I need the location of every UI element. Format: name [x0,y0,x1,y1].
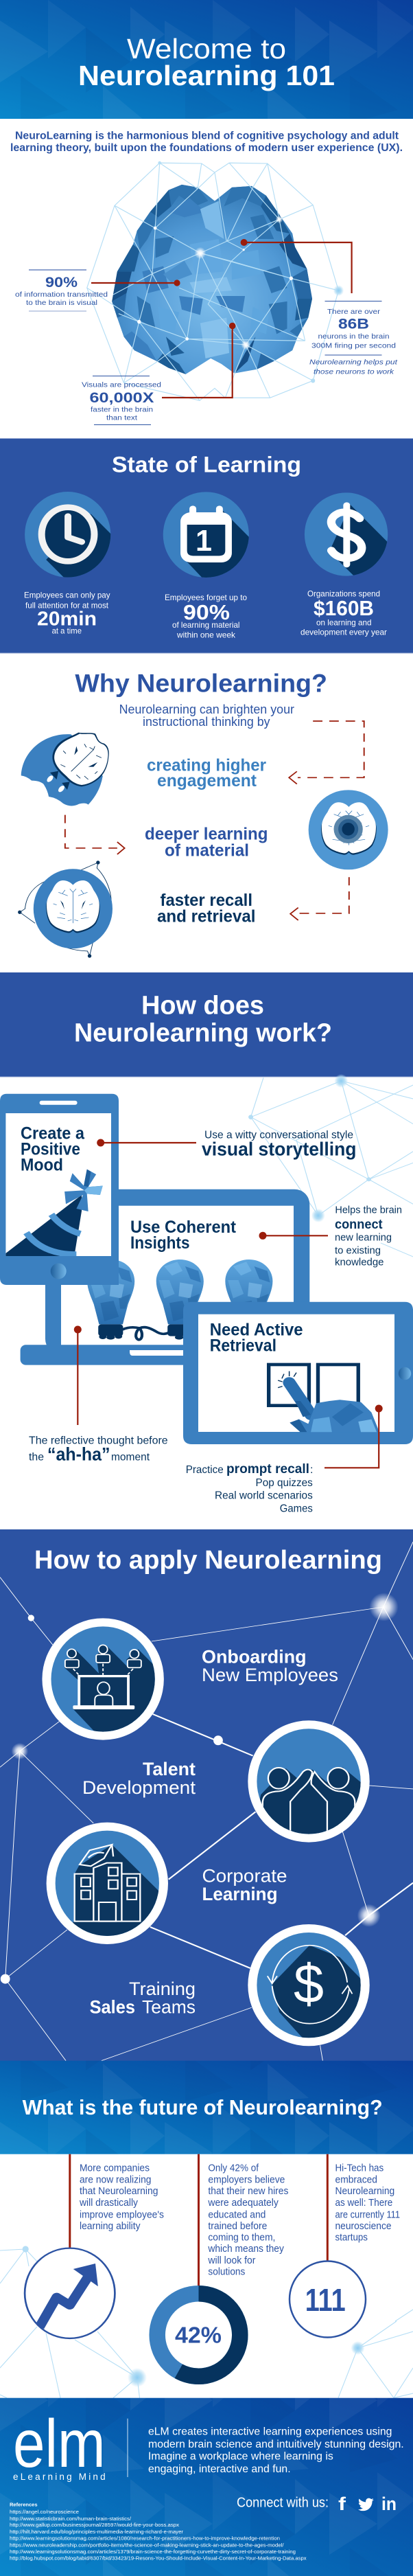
icon: onboarding [42,1618,172,1740]
callout: 90 percent: to the brain is visual [26,299,97,307]
text: only 42 percent: educated and [208,2209,266,2220]
text: only 42 percent: Only 42% of [208,2163,259,2174]
callout: ah-ha moment: “ah-ha” [47,1444,110,1465]
icon: talent high five [248,1720,370,1843]
text: about eLM [148,2426,404,2475]
text: talent development [82,1759,196,1798]
callout: visual storytelling: visual storytelling [202,1138,357,1159]
callout: 86B neurons: 300M firing per second [311,342,396,350]
callout: connect: knowledge [335,1257,384,1268]
title: Neurolearning 101 [78,60,335,91]
callout: 90 percent [15,269,180,312]
text: 90 percent forget: 90% [183,600,230,624]
heading: why neurolearning: Why Neurolearning? [75,670,327,698]
badge: 111 startups: 111 [305,2282,346,2318]
text: training sales teams [90,1979,196,2018]
text: creating higher engagement [147,756,266,790]
text: only 42 percent: trained before [208,2221,267,2232]
text: talent development: Development [82,1777,196,1798]
text: hi-tech [335,2163,400,2243]
text: deeper learning of material: deeper learning [145,825,268,844]
heading: use coherent insights: Use Coherent [130,1218,237,1237]
text: only 42 percent: employers believe [208,2174,285,2185]
callout: 60,000X: Visuals are processed [82,380,161,389]
heading: how to apply: How to apply Neurolearning [34,1546,382,1575]
heading: how does [74,992,332,1048]
callout: ah-ha moment: the [29,1452,44,1463]
title: Welcome to [127,33,286,65]
callout: visual storytelling [97,1129,356,1159]
text: only 42 percent [207,2163,288,2278]
text: more companies: are now realizing [80,2174,151,2185]
references [10,2503,307,2561]
text: 160B: $160B [314,596,374,620]
callout: ah-ha moment: moment [111,1452,150,1463]
device: tablet [183,1302,413,1444]
icon: corporate learning building [47,1823,168,1948]
text: about eLM: Imagine a workplace where learning is [148,2450,333,2463]
references: https://www.neuroleadership.com/portfolio-items/the-science-of-making-learning-stick-an-update-to-the-ages-model/ [10,2543,284,2548]
text: only 42 percent: were adequately [207,2198,279,2209]
text: only 42 percent: coming to them, [208,2232,275,2243]
icon: party hat [5,1170,103,1256]
text: hi-tech: Neurolearning [335,2186,394,2197]
icon: brain being bitten [21,733,109,806]
heading: create a positive mood: Positive [21,1140,80,1159]
network background: future section [0,2246,413,2398]
callout: prompt recall: Pop quizzes [255,1477,313,1489]
text: corporate learning: Learning [202,1884,277,1904]
icon: clock [25,492,111,578]
callout: 60,000X: 60,000X [89,390,154,406]
callout: prompt recall: Practice [186,1464,224,1476]
text: 160B: development every year [300,628,387,637]
icon: calendar [163,492,249,578]
donut chart: 42 percent [157,2294,240,2376]
text: training sales teams: Sales [90,1997,135,2018]
intro text: learning theory, built upon the foundations of modern user experience (UX). [10,142,403,154]
callout: connect: to existing [335,1245,381,1257]
text: 90 percent forget [165,593,247,640]
callout: ah-ha moment [29,1325,168,1465]
text: only 42 percent: that their new hires [208,2186,288,2197]
text: 20min: full attention for at most [25,601,109,611]
network lines: white [0,1542,413,2061]
text: 160B [300,589,387,637]
panel: how to apply neurolearning [0,1529,413,2061]
references: References [10,2503,38,2507]
network background: right [248,1074,413,1257]
text: talent development: Talent [143,1759,196,1779]
callout: 86B neurons: There are over [327,308,381,316]
text: hi-tech: neuroscience [335,2221,391,2232]
icon: three brain light bulbs [87,1259,272,1340]
heading: use coherent insights [130,1218,237,1253]
text: deeper learning of material [145,825,268,860]
text: only 42 percent: will look for [207,2255,256,2266]
icon: facebook: f [338,2494,346,2514]
panel: state of learning [0,438,413,654]
column: hi-tech [290,2154,400,2338]
text: deeper learning of material: of material [165,841,249,860]
text: about eLM: eLM creates interactive learning experiences using [148,2426,392,2438]
badge: 111 startups [290,2261,366,2338]
panel: future of neurolearning banner [0,2061,413,2154]
text: 20min: Employees can only pay [24,591,110,600]
text: onboarding: Onboarding [202,1647,307,1667]
icon: connected brain [18,860,113,958]
references: https://angel.co/neuroscience [10,2510,79,2515]
icon: dollar symbol: $ [294,1953,324,2014]
text: creating higher engagement: creating higher [147,756,266,775]
callout: 60,000X: than text [106,414,137,422]
text: only 42 percent: solutions [208,2267,245,2278]
text: 20min [24,591,110,636]
intro text: NeuroLearning is the harmonious blend of cognitive psychology and adult [15,130,399,141]
arrows: dashed connectors [65,721,364,920]
text: training sales teams: Training [129,1979,196,1999]
callout: 86B neurons: Neurolearning helps put [309,358,398,367]
heading: need active retrieval: Retrieval [210,1336,276,1355]
references: http://blog.hubspot.com/blog/tabid/6307/bid/33423/19-Resons-You-Should-Include-Visual-Content-In-Your-Marketing-Data.aspx [10,2556,307,2561]
text: more companies: that Neurolearning [80,2186,158,2197]
text: faster recall and retrieval: faster recall [161,891,252,910]
text: more companies: More companies [80,2163,150,2174]
icon: brain with focus spot [309,790,388,869]
intro text [10,130,403,154]
text: more companies: improve employee's [80,2209,164,2220]
text: hi-tech: Hi-Tech has [335,2163,384,2174]
callout: ah-ha moment: The reflective thought before [29,1435,168,1447]
text: 90 percent forget: Employees forget up to [165,593,247,602]
text: why intro: Neurolearning can brighten your [119,703,294,716]
icon: hand tapping screen [269,1365,379,1432]
heading: future: What is the future of Neurolearning? [23,2095,383,2119]
text: faster recall and retrieval [157,891,255,926]
device: phone [0,1094,119,1285]
callout: connect: connect [335,1218,383,1232]
text: why intro: instructional thinking by [143,715,270,729]
references: http://www.statisticbrain.com/human-brain-statistics/ [10,2517,131,2522]
donut chart: 42 percent: 42% [175,2323,222,2348]
text: onboarding: New Employees [202,1665,338,1685]
column: more companies [25,2154,164,2338]
callout: 90 percent: 90% [45,275,78,290]
text: connect with us: Connect with us: [237,2496,329,2511]
text: creating higher engagement: engagement [157,771,257,790]
callout: 86B neurons: those neurons to work [314,368,394,376]
text: hi-tech: are currently 111 [335,2209,400,2220]
title [78,33,335,91]
text: onboarding [202,1647,338,1685]
heading: create a positive mood [21,1124,85,1175]
logo: eLearning Mind: eLearning Mind [13,2472,106,2482]
icon: sales dollar cycle [248,1924,370,2046]
text: only 42 percent: which means they [207,2244,285,2255]
text: more companies: learning ability [80,2221,141,2232]
panel: footer [0,2398,413,2576]
heading: use coherent insights: Insights [130,1233,189,1253]
callout: prompt recall [186,1405,383,1515]
text: hi-tech: as well: There [335,2198,392,2209]
icon: calendar numeral: 1 [196,524,212,558]
text: about eLM: engaging, interactive and fun. [148,2463,291,2475]
callout: 90 percent: of information transmitted [15,290,108,299]
heading: state of learning: State of Learning [112,453,301,477]
text: more companies [79,2163,164,2232]
heading: create a positive mood: Mood [21,1156,63,1175]
text: training sales teams: Teams [142,1997,196,2018]
logo: eLearning Mind: elm [13,2406,106,2481]
callout: prompt recall: Games [280,1503,313,1515]
text: why intro [119,703,294,729]
heading: how does: Neurolearning work? [74,1019,332,1048]
text: about eLM: modern brain science and intuitively stunning design. [148,2439,404,2450]
callout: 86B neurons: neurons in the brain [318,332,390,341]
device: laptop [21,1189,309,1365]
callout: visual storytelling: Use a witty conversational style [204,1129,353,1141]
text: 160B: Organizations spend [307,589,380,599]
text: 90 percent forget: of learning material [172,620,240,630]
references: http://www.learningsolutionsmag.com/articles/1080/research-for-practitioners-how-to-improve-knowledge-retention [10,2536,280,2541]
text: hi-tech: startups [335,2232,368,2243]
heading: how does: How does [141,992,264,1021]
icon: dollar [305,492,388,576]
panel: header [0,0,413,119]
heading: need active retrieval: Need Active [210,1320,303,1339]
references: http://www.learningsolutionsmag.com/articles/1379/brain-science-the-forgetting-curvethe-dirty-secret-of-corporate-training [10,2550,296,2555]
text: more companies: will drastically [79,2198,139,2209]
text: corporate learning: Corporate [202,1866,287,1887]
low-poly brain illustration [112,185,312,374]
callout: 60,000X: faster in the brain [91,405,153,413]
heading: need active retrieval [210,1320,303,1355]
icon: rising arrow [25,2248,115,2338]
callout: connect: Helps the brain [335,1205,402,1216]
callout: connect [259,1205,402,1268]
text: faster recall and retrieval: and retrieval [157,907,255,926]
callout: connect: new learning [335,1232,392,1244]
references: http://www.gallup.com/businessjournal/28597/would-fire-your-boss.aspx [10,2523,180,2528]
text: corporate learning [202,1866,287,1904]
callout: 60,000X [82,323,236,425]
network lines over brain [87,161,344,400]
icon: twitter [358,2498,374,2511]
text: 160B: on learning and [316,618,372,628]
column: only 42 percent [157,2154,288,2376]
callout: prompt recall: prompt recall [226,1462,309,1477]
callout: prompt recall: Real world scenarios [215,1490,313,1502]
text: 90 percent forget: within one week [176,630,236,640]
icon: linkedin: in [381,2494,397,2514]
callout: 86B neurons: 86B [338,316,369,332]
text: 20min: at a time [52,626,82,636]
text: hi-tech: embraced [335,2174,377,2185]
panel: how does neurolearning work [0,972,413,1077]
callout: 86B neurons [241,239,398,376]
callout: prompt recall: : [310,1464,313,1476]
heading: create a positive mood: Create a [21,1124,85,1143]
references: http://hilt.harvard.edu/blog/principles-multimedia-learning-richard-e-mayer [10,2530,184,2535]
text: 20min: 20min [37,608,97,630]
